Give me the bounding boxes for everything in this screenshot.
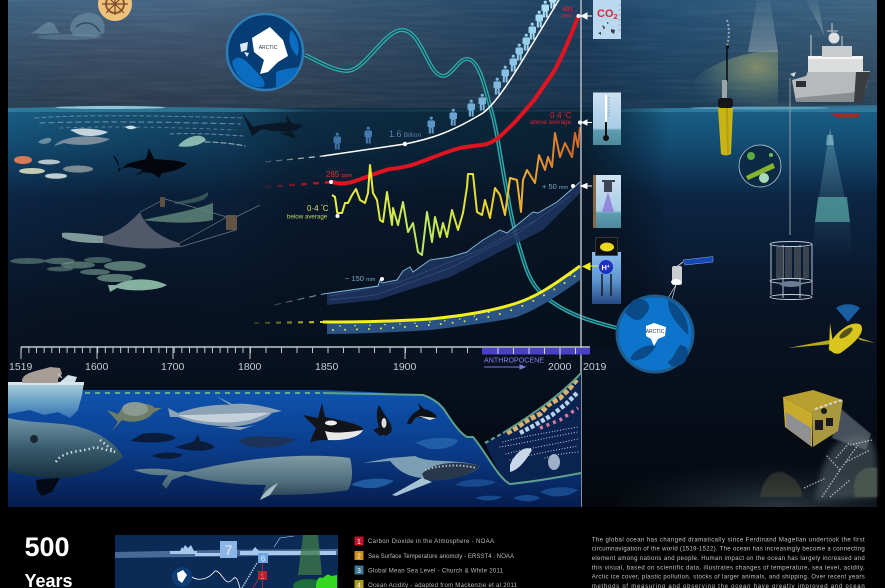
mini research beams: [298, 535, 322, 575]
mini key diagram: [115, 535, 338, 588]
mini research vessel: [293, 579, 323, 588]
timeline years: 2019: [583, 361, 607, 373]
panel: ocean surface from below and sky: [8, 0, 877, 109]
title: 500: [24, 532, 70, 562]
icon: plankton circle: [739, 145, 781, 187]
legend: data sources: 2: [357, 554, 361, 560]
panel: thermometer: [550, 92, 621, 145]
icon: humpback whale head: [8, 418, 123, 496]
legend item 1: [354, 536, 364, 546]
icon: striped dolphin: [168, 396, 282, 430]
line: ocean acidity: [254, 266, 580, 334]
hull swath beam and ocean-colour patch: [693, 0, 824, 105]
icon: ROV light beam: [832, 408, 871, 450]
icon: Argo float: [718, 20, 733, 156]
label: ANTHROPOCENE: ANTHROPOCENE: [484, 358, 544, 364]
arrow: [581, 184, 592, 188]
panel: tide gauge: [581, 175, 621, 228]
arrow: [583, 263, 598, 270]
icon: satellite: [650, 256, 713, 327]
timeline years: [9, 361, 607, 373]
legend item 4: [354, 580, 364, 588]
label: 0.4 C above average: °: [564, 111, 566, 117]
fishing trawl net: [62, 192, 260, 248]
icon: compass rose: [98, 0, 132, 21]
green dashed trend line: [85, 392, 322, 394]
icon: sperm whale: [133, 456, 352, 500]
line: world population: [265, 0, 560, 162]
icon: ice floe: [8, 375, 84, 418]
label: +50 mm: + 50 mm: [542, 182, 568, 191]
panel: water column: [8, 105, 877, 507]
legend item 3: [354, 566, 364, 574]
line: global mean sea level: [274, 182, 580, 305]
icon: research vessel: [790, 23, 870, 118]
label: CO2: CO: [597, 8, 614, 20]
text block: intro paragraph: this visual, based on scientific data, illustrates changes of temperature, sea level, acidity,: [592, 565, 865, 571]
panel: larger animals ocean section: [8, 373, 581, 507]
arrow: [582, 120, 592, 125]
text block: intro paragraph: element among nations and people. Human impact on the ocean has largely increased and: [592, 556, 865, 562]
icon group: world population figures: [334, 0, 556, 149]
label: 0.4 C below average: 0·4: [307, 204, 319, 213]
shark silhouette dark: [242, 112, 303, 139]
timeline years: 1700: [161, 361, 185, 373]
label: 0.4 C below average: C: [323, 204, 329, 213]
label: below average: below average: [287, 214, 328, 220]
text block: intro paragraph: circumnavigation of the world (1519-1522). The ocean has increasingly become a connecting: [592, 547, 865, 553]
label: ppm unit: ppm: [562, 13, 572, 19]
label: ARCTIC: ARCTIC: [259, 45, 278, 51]
mini key diagram: 7: [225, 542, 233, 558]
vertical line: present day marker: [580, 0, 582, 507]
icon: orca: [303, 403, 363, 443]
label: CO2: 2: [614, 12, 618, 21]
mini globe: [172, 567, 192, 587]
text block: intro paragraph: [592, 537, 865, 588]
legend: data sources: [354, 536, 518, 588]
legend: data sources: 1: [357, 539, 361, 546]
text block: intro paragraph: The global ocean has changed dramatically since Ferdinand Magellan undertook the first: [592, 537, 865, 543]
wire to rosette sampler: [789, 78, 791, 235]
arrow: [581, 13, 592, 19]
label: 285 ppm: 285 ppm: [326, 170, 353, 179]
anthropocene band: [482, 348, 590, 369]
timeline years: 1900: [393, 361, 417, 373]
label: above average: above average: [530, 119, 571, 126]
legend item 2: [354, 551, 364, 560]
timeline years: 1850: [315, 361, 339, 373]
legend: data sources: Global Mean Sea Level - Church & White 2011: [368, 568, 504, 574]
legend: data sources: Carbon Dioxide in the Atmosphere - NOAA: [368, 539, 494, 545]
label: ARCTIC: ARCTIC: [646, 329, 665, 335]
silhouettes: ghost whales: [351, 438, 578, 501]
label: 0.4 C below average: °: [321, 204, 323, 210]
small reef fish: [14, 156, 93, 179]
cod school: [10, 257, 167, 292]
timeline years: 1800: [238, 361, 262, 373]
icon: sea turtle: [107, 402, 162, 431]
icon: humpback whale: [363, 456, 480, 496]
label: -150 mm: − 150 mm: [345, 274, 376, 283]
icon: CTD rosette sampler: [770, 242, 812, 300]
key number 7: [220, 541, 237, 558]
icon: walrus on ice: [22, 367, 62, 383]
label: 1.6 Billion: 1.6 Billion: [389, 129, 421, 139]
title: [24, 532, 73, 588]
plastic pollution wedge: [485, 373, 581, 484]
timeline years: 2000: [548, 361, 572, 373]
silhouettes: dark whales and dolphin: [130, 433, 296, 459]
arrow: [484, 365, 525, 369]
label: H+: H: [602, 263, 607, 272]
icon: Arctic globe 2019: [617, 296, 693, 372]
tuna group: [38, 126, 206, 147]
icon: sea monsters: [30, 13, 105, 40]
icon: sonar beam: [812, 128, 852, 258]
panel: CO2 sample: [576, 0, 621, 39]
label: 0.4 C above average: C: [566, 111, 572, 120]
seafloor: [620, 440, 877, 507]
icon: Arctic globe 1979: [227, 14, 303, 90]
icon: remotely operated vehicle: [783, 390, 843, 447]
icon: cold-water coral: [760, 436, 877, 500]
icon: underwater glider: [788, 304, 875, 354]
timeline axis: [21, 347, 590, 359]
label: 0.4 C above average: 0·4: [550, 111, 562, 120]
line: Arctic sea ice extent: [305, 30, 617, 328]
key number 6: [258, 553, 268, 563]
mini key diagram: 6: [261, 554, 266, 564]
panel: acidity lemon and pH probe: [583, 238, 621, 304]
shark silhouette black: [113, 148, 187, 178]
line: sea surface temperature: [307, 127, 580, 255]
label: H+: +: [607, 264, 610, 270]
text block: intro paragraph: Arctic ice cover, plastic pollution, stocks of larger animals, and shipping. Over recent years: [592, 575, 865, 581]
fish school near the surface: [35, 116, 245, 146]
line: CO2 in the atmosphere: [265, 6, 578, 187]
timeline years: 1519: [9, 361, 33, 373]
mini key diagram: 1: [260, 572, 265, 580]
legend: data sources: Sea Surface Temperature anomoly - ERSST4 . NOAA: [368, 554, 514, 560]
key number 1: [258, 571, 267, 580]
legend: data sources: 3: [357, 568, 361, 575]
label: 401 ppm: 401: [562, 6, 573, 13]
icon: two small orcas: [373, 403, 437, 436]
timeline years: 1600: [85, 361, 109, 373]
